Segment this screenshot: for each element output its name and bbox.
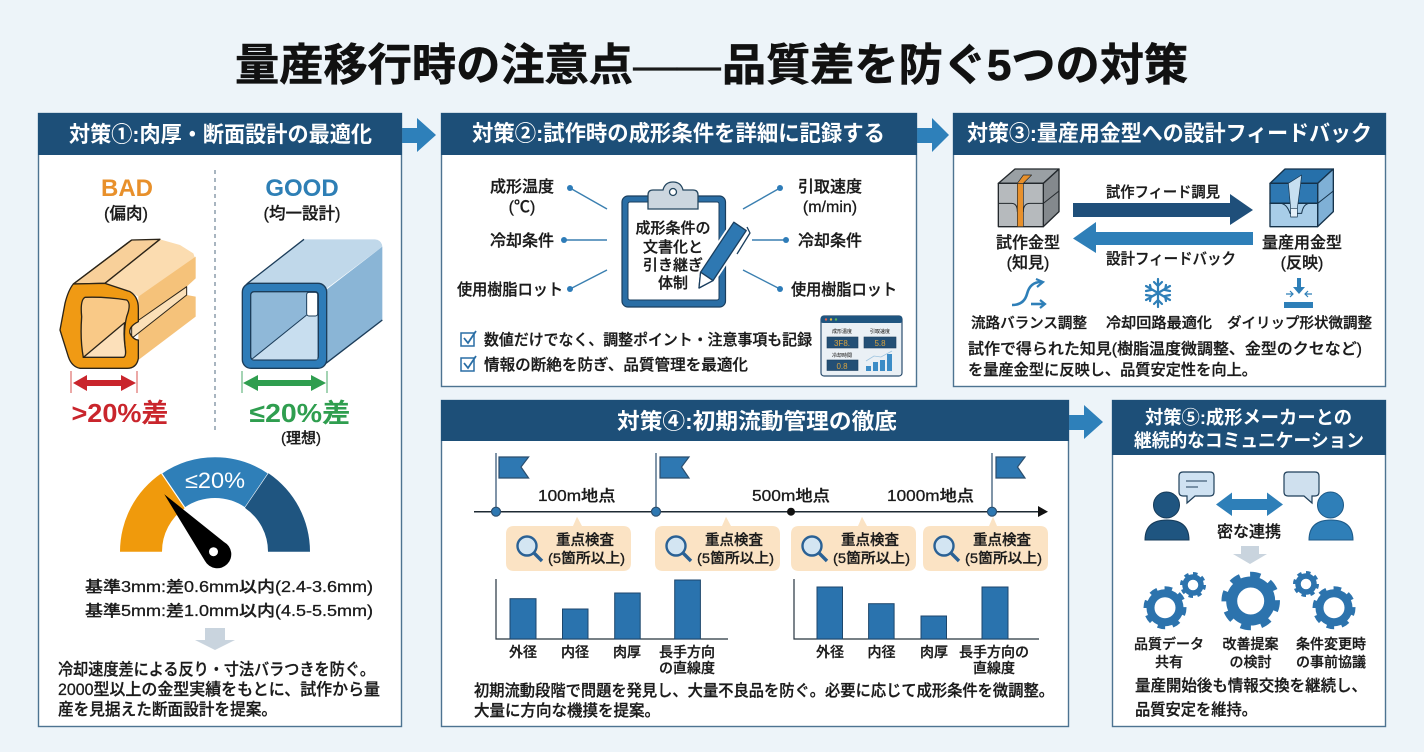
label: 500m: 500m地点 [752, 487, 830, 505]
label: molding temperature: 成形温度 [490, 178, 554, 196]
icon: flow balance [1012, 279, 1045, 308]
label: production mold [1262, 234, 1342, 272]
label: improvement proposals: 改善提案 [1222, 636, 1278, 652]
icon: gears prior consultation [1294, 572, 1354, 627]
icon: speech bubble left [1179, 472, 1214, 503]
label: production mold: (反映) [1281, 254, 1323, 272]
label: prototype feed: 試作フィード調見 [1106, 184, 1220, 201]
callout: inspection 3 [791, 517, 916, 571]
arrow: step 2 to step 3 [917, 118, 949, 152]
label: BAD: BAD [101, 175, 153, 202]
label: GOOD: GOOD [265, 175, 339, 202]
chart: bars left [496, 579, 728, 676]
title: 品質差を防ぐ5つの対策 [722, 41, 1188, 90]
chart: bars right: 内径 [868, 644, 896, 660]
chart: bars left: の直線度 [659, 660, 715, 676]
icon: uniform profile [242, 239, 382, 368]
icon: dashboard: 0.8 [836, 362, 848, 371]
text: clipboard caption: 引き継ぎ [643, 257, 703, 274]
callout: inspection 1 [506, 517, 631, 571]
label: cooling right: 冷却条件 [798, 232, 862, 250]
icon: dashboard: 5.8 [874, 339, 886, 348]
chart: bars right [794, 579, 1039, 676]
callout: inspection 1: (5箇所以上) [548, 550, 625, 566]
label: 1000m: 1000m地点 [887, 487, 974, 505]
label: cooling circuit: 冷却回路最適化 [1106, 314, 1213, 332]
text: panel 1 summary: 2000型以上の金型実績をもとに、試作から量 [58, 680, 380, 699]
label: ideal: (理想) [281, 430, 321, 447]
callout: inspection 3: (5箇所以上) [833, 550, 910, 566]
panel: measure 5 communication [1112, 400, 1386, 726]
text: clipboard caption: 体制 [658, 275, 688, 292]
heading: measure 4: 対策④:初期流動管理の徹底 [617, 409, 897, 434]
text: 3mm standard: 基準3mm:差0.6mm以内(2.4-3.6mm) [85, 578, 373, 596]
arrow: back to prototype mold [1073, 222, 1253, 253]
label: pull speed: 引取速度 [798, 178, 862, 196]
arrow: green width [242, 371, 327, 393]
callout: inspection 3: 重点検査 [841, 532, 899, 549]
label: pull speed [798, 178, 862, 216]
label: prior consultation: の事前協議 [1296, 654, 1366, 670]
icon: die lip adjustment [1284, 278, 1313, 308]
label: quality data sharing: 品質データ [1134, 636, 1204, 652]
icon: clipboard [622, 182, 726, 307]
callout: inspection 4: (5箇所以上) [965, 550, 1042, 566]
checklist item 1: 数値だけでなく、調整ポイント・注意事項も記録 [484, 331, 812, 349]
label: design feedback: 設計フィードバック [1106, 250, 1236, 268]
text: panel 1 summary [58, 660, 380, 719]
label: quality data sharing: 共有 [1155, 654, 1183, 670]
chart: gauge [120, 457, 310, 568]
label: improvement proposals [1222, 636, 1278, 670]
label: quality data sharing [1134, 636, 1204, 670]
label: prototype mold [996, 234, 1060, 272]
title: 量産移行時の注意点 [235, 41, 633, 90]
icon: dashboard: 3F8. [834, 339, 850, 348]
label: prior consultation [1296, 636, 1366, 670]
label: uniform design: (均一設計) [264, 204, 340, 223]
label: prototype mold: (知見) [1007, 254, 1049, 272]
chart: gauge: ≤20% [185, 468, 245, 493]
text: panel 1 summary: 産を見据えた断面設計を提案。 [58, 700, 277, 719]
text: panel 4 summary [474, 682, 1054, 720]
icon: production mold [1270, 169, 1333, 227]
icon: dashboard: 成形温度 [832, 328, 852, 335]
label: prototype mold: 試作金型 [996, 234, 1060, 252]
chart: bars right: 肉厚 [920, 644, 948, 660]
icon: person right [1309, 492, 1353, 540]
text: panel 1 summary: 冷却速度差による反り・寸法バラつきを防ぐ。 [58, 660, 375, 679]
icon: uneven profile [60, 239, 196, 368]
label: cooling left: 冷却条件 [490, 232, 554, 250]
label: over 20 percent: >20%差 [72, 398, 168, 428]
label: flow balance: 流路バランス調整 [971, 315, 1087, 332]
label: pull speed: (m/min) [803, 199, 857, 216]
icon: person left [1145, 492, 1189, 540]
icon: dashboard: 引取速度 [870, 328, 890, 335]
icon: dashboard [821, 316, 902, 376]
label: improvement proposals: の検討 [1230, 654, 1272, 670]
label: prior consultation: 条件変更時 [1296, 636, 1366, 652]
text: panel 3 summary [968, 340, 1362, 379]
text: panel 5 summary [1135, 677, 1367, 719]
heading: measure 5 [1134, 407, 1364, 451]
label: molding temperature: (℃) [509, 199, 535, 216]
connector lines [561, 185, 789, 292]
arrow: down [1233, 546, 1267, 564]
heading: measure 3: 対策③:量産用金型への設計フィードバック [967, 121, 1372, 146]
callout: inspection 1: 重点検査 [556, 532, 614, 549]
label: resin lot left: 使用樹脂ロット [457, 281, 563, 299]
heading: measure 2: 対策②:試作時の成形条件を詳細に記録する [472, 121, 885, 146]
panel: measure 2 record conditions [441, 113, 917, 386]
callout: inspection 4: 重点検査 [973, 532, 1031, 549]
text: panel 4 summary: 初期流動段階で問題を発見し、大量不良品を防ぐ。必要に応じて成形条件を微調整。 [474, 682, 1054, 700]
heading: measure 1: 対策①:肉厚・断面設計の最適化 [69, 122, 372, 147]
arrow: to production mold [1073, 194, 1253, 225]
chart: bars left: 外径 [509, 644, 537, 660]
icon: gears data share [1146, 574, 1204, 627]
text: panel 5 summary: 量産開始後も情報交換を継続し、 [1135, 677, 1367, 695]
text: panel 3 summary: を量産金型に反映し、品質安定性を向上。 [968, 361, 1257, 379]
chart: timeline [474, 453, 1048, 517]
arrow: red width [71, 371, 137, 393]
callout: inspection 2: 重点検査 [705, 532, 763, 549]
text: clipboard caption [635, 220, 711, 292]
icon: gear improvement [1224, 574, 1277, 628]
label: 100m: 100m地点 [538, 487, 616, 505]
chart: bars left: 内径 [561, 644, 589, 660]
label: uneven wall: (偏肉) [104, 204, 148, 223]
panel: measure 4 initial run management [441, 400, 1069, 726]
chart: bars right: 直線度 [973, 660, 1015, 676]
panel: measure 3 mold feedback [953, 113, 1386, 386]
heading: measure 5: 継続的なコミュニケーション [1134, 430, 1364, 451]
arrow: step 1 to step 2 [402, 118, 436, 152]
title: —— [633, 41, 721, 90]
chart: bars right: 外径 [816, 644, 844, 660]
heading: measure 5: 対策⑤:成形メーカーとの [1145, 407, 1352, 428]
label: resin lot right: 使用樹脂ロット [791, 281, 897, 299]
arrow: down [195, 628, 235, 650]
callout: inspection 2: (5箇所以上) [697, 550, 774, 566]
chart: bars left: 肉厚 [613, 644, 641, 660]
text: 5mm standard: 基準5mm:差1.0mm以内(4.5-5.5mm) [85, 602, 373, 620]
chart: bars left: 長手方向 [659, 644, 715, 660]
callout: inspection 4 [923, 517, 1048, 571]
arrow: two way link [1216, 492, 1283, 516]
panel: measure 1 wall thickness design [38, 113, 402, 726]
arrow: step 4 to step 5 [1069, 405, 1103, 439]
text: panel 5 summary: 品質安定を維持。 [1135, 701, 1257, 719]
label: production mold: 量産用金型 [1262, 234, 1342, 252]
callout: inspection 2 [655, 517, 780, 571]
text: panel 4 summary: 大量に方向な機摸を提案。 [474, 702, 660, 720]
title [235, 41, 1188, 90]
label: die lip: ダイリップ形状微調整 [1227, 314, 1372, 332]
label: under 20 percent: ≤20%差 [250, 398, 350, 428]
text: clipboard caption: 文書化と [643, 239, 703, 256]
checklist item 2: 情報の断絶を防ぎ、品質管理を最適化 [484, 356, 748, 374]
text: clipboard caption: 成形条件の [635, 220, 711, 237]
icon: dashboard: 冷却時間 [832, 352, 852, 359]
text: panel 3 summary: 試作で得られた知見(樹脂温度微調整、金型のクセなど) [968, 340, 1362, 358]
chart: bars right: 長手方向の [959, 644, 1029, 660]
label: close cooperation: 密な連携 [1217, 523, 1281, 541]
icon: prototype mold [998, 169, 1059, 227]
icon: snowflake [1146, 279, 1170, 307]
icon: speech bubble right [1284, 472, 1319, 503]
icon: pen [699, 222, 750, 288]
label: molding temperature [490, 178, 554, 216]
